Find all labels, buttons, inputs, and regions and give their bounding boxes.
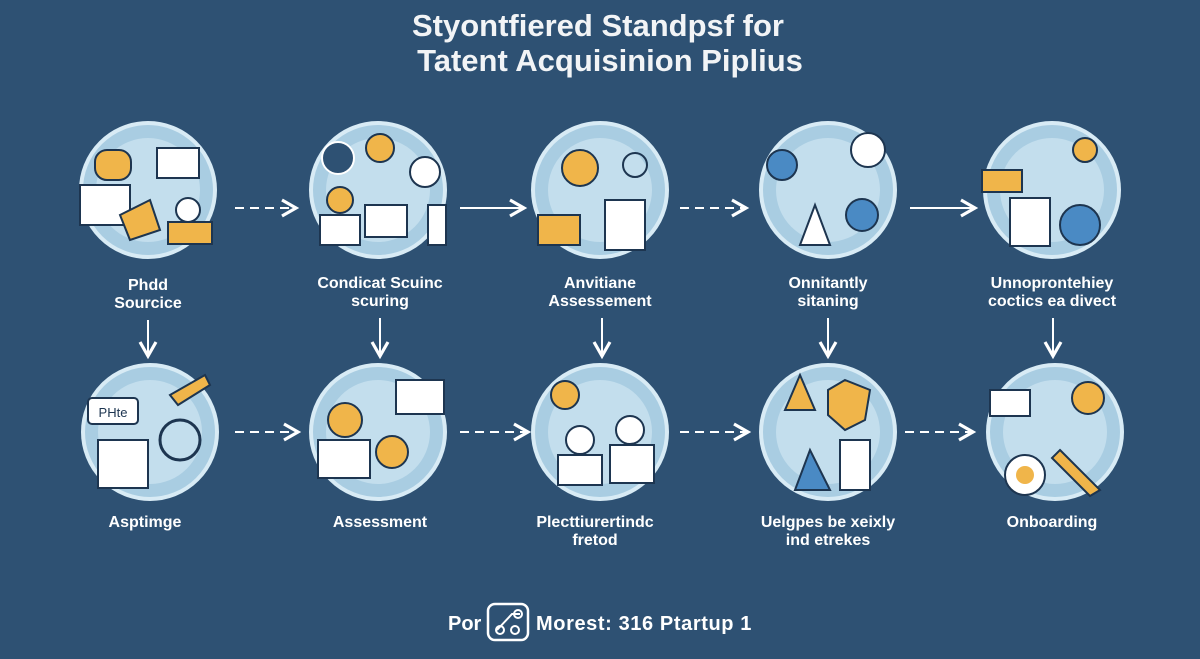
step 5 (982, 123, 1119, 310)
step 8 (533, 365, 667, 549)
footer: Por (448, 613, 482, 635)
step 4: sitaning (797, 293, 859, 310)
label: Onboarding (1007, 514, 1097, 531)
title (412, 8, 803, 78)
step 3 (533, 123, 667, 310)
footer: Morest: 316 Ptartup 1 (536, 613, 752, 635)
label: Condicat Scuinc (317, 275, 443, 292)
title: Tatent Acquisinion Piplius (417, 43, 803, 78)
footer (448, 604, 752, 640)
label: Asptimge (109, 514, 182, 531)
label: Uelgpes be xeixly (761, 514, 895, 531)
step 4 (761, 123, 895, 310)
step 6: PHte (99, 405, 127, 420)
step 1: Phdd Sourcice (80, 123, 215, 312)
step 2: scuring (351, 293, 409, 310)
step 3: Assessement (548, 293, 652, 310)
label: Plecttiurertindc (536, 514, 654, 531)
label: Anvitiane (564, 275, 636, 292)
label: Onnitantly (788, 275, 868, 292)
step 8: fretod (572, 532, 618, 549)
step 9: ind etrekes (786, 532, 870, 549)
step 1: Phdd Sourcice: Sourcice (114, 295, 182, 312)
step 2 (311, 123, 446, 310)
step 6 (83, 365, 217, 531)
step 9 (761, 365, 895, 549)
title: Styontfiered Standpsf for (412, 8, 784, 43)
step 7 (311, 365, 445, 531)
label: Unnoprontehiey (991, 275, 1113, 292)
step 5: coctics ea divect (988, 293, 1117, 310)
step 10 (988, 365, 1122, 531)
label: Assessment (333, 514, 428, 531)
label: Phdd (128, 277, 168, 294)
arrows (148, 208, 1053, 432)
